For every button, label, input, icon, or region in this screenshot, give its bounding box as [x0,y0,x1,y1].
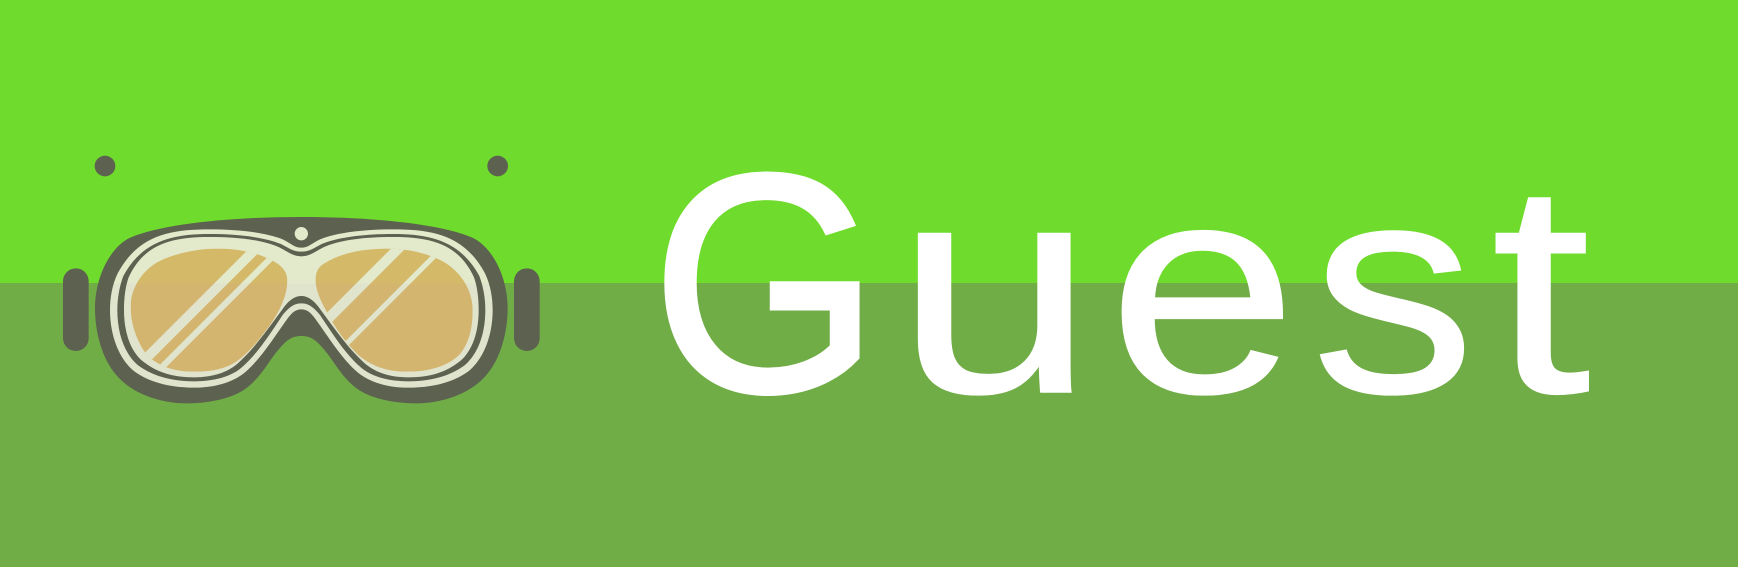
title: Guest: t [1491,120,1592,456]
goggle body [95,217,508,403]
title: Guest: G [652,110,879,456]
left strap tab [63,268,89,351]
left rivet dot [95,156,115,176]
left lens [130,248,288,372]
left lens wide stripe [145,252,258,360]
outer cream rim [110,229,493,388]
right lens thin stripe [346,256,436,345]
right lens wide stripe [327,248,404,322]
dark gap ring [117,234,485,381]
bridge highlight dot [295,227,308,240]
right rivet dot [487,156,508,176]
right lens [316,248,473,372]
left lens thin stripe [160,258,272,367]
right strap tab [514,268,540,351]
title: Guest: s [1312,120,1475,456]
icon: goggles [63,156,540,403]
inner cream frame [124,237,479,377]
title: Guest: e [1108,120,1297,456]
background: bottom green band [0,283,1738,567]
background: top green band [0,0,1738,283]
title: Guest: u [896,120,1094,456]
